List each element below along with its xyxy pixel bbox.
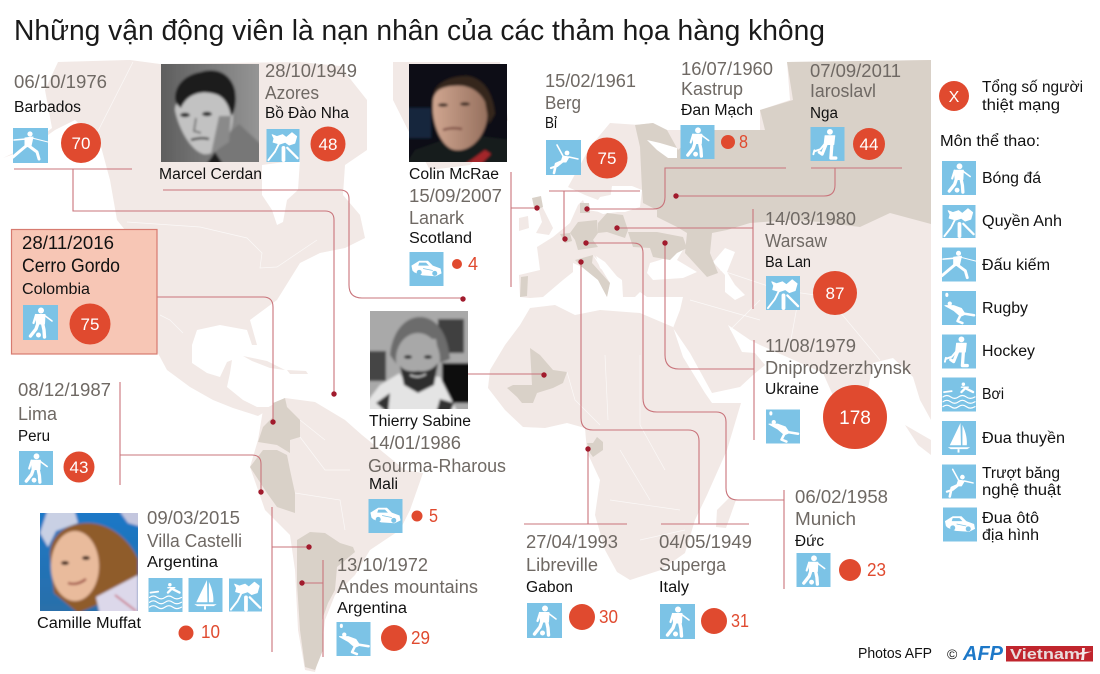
legend: total deaths marker [939, 81, 969, 111]
death toll 75 [586, 138, 628, 178]
panel: Warsaw 1980: 87 [826, 284, 844, 303]
icon: football [19, 451, 53, 485]
legend: rally car: Đua ôtô [982, 510, 1039, 527]
country: Đức [795, 533, 824, 550]
panel: Andes 1972 [336, 555, 478, 656]
place: Lima [18, 404, 58, 424]
map: Madagascar [716, 497, 736, 528]
panel: Superga 1949 [659, 532, 752, 639]
map: Eurasia [519, 60, 931, 445]
panel: Berg 1961: 75 [598, 149, 616, 168]
country: Argentina [147, 554, 218, 571]
legend [939, 79, 1083, 544]
person name: Thierry Sabine [369, 413, 471, 430]
map: White Sea overlay [647, 140, 677, 158]
date: 09/03/2015 [147, 508, 240, 528]
place: Villa Castelli [147, 531, 242, 551]
legend: hockey [942, 334, 1035, 368]
panel: Lanark 2007 [409, 166, 502, 286]
legend: swimming [942, 378, 1004, 412]
panel: Kastrup 1960 [680, 59, 773, 159]
map: Caribbean islands [243, 356, 308, 374]
legend: figure skating: Trượt băng [982, 465, 1060, 482]
icon: boxing [266, 129, 300, 162]
death toll 10 [178, 626, 194, 640]
date: 08/12/1987 [18, 380, 111, 400]
legend: hockey: Hockey [982, 343, 1035, 360]
photo: Colin McRae [409, 64, 507, 162]
legend: sailing [942, 421, 1065, 455]
panel: Gourma-Rharous 1986: 5 [429, 506, 438, 526]
place: Andes mountains [337, 577, 478, 597]
map: Argentina highlighted [297, 532, 355, 670]
highlighted box [12, 230, 157, 354]
date: 06/02/1958 [795, 487, 888, 507]
place: Lanark [409, 208, 465, 228]
date: 14/01/1986 [369, 433, 461, 453]
panel: Superga 1949: 31 [731, 611, 749, 631]
Vietnam+ logo [1006, 646, 1093, 663]
map: White Sea [647, 140, 677, 158]
panel: Munich 1958 [795, 487, 888, 587]
panel: Kastrup 1960: 8 [739, 132, 748, 152]
icon: boxing [229, 578, 262, 612]
death toll 5 [412, 510, 422, 522]
country: Ukraine [765, 381, 819, 398]
legend: sailing: Đua thuyền [982, 430, 1065, 447]
date: 27/04/1993 [526, 532, 618, 552]
legend: football [942, 161, 1041, 195]
legend: rugby: Rugby [982, 300, 1028, 317]
country: Scotland [409, 230, 472, 247]
photo: Marcel Cerdan [161, 64, 259, 162]
country: Bỉ [545, 115, 557, 132]
panel: Barbados 1976: 70 [72, 134, 90, 153]
death toll 30 [569, 604, 595, 630]
panel: Dniprodzerzhynsk 1979: 178 [839, 408, 871, 429]
connector lines [14, 168, 902, 657]
panel: Berg 1961 [545, 71, 636, 178]
icon: boxing [766, 276, 800, 310]
legend: thiệt mạng [982, 97, 1060, 114]
map: Russia highlighted [635, 60, 931, 277]
place: Azores [265, 83, 319, 103]
icon: hockey [810, 127, 844, 161]
footer credits [858, 643, 1093, 665]
icon: fencing [13, 128, 48, 163]
place: Cerro Gordo [22, 256, 120, 277]
death toll 48 [310, 126, 346, 162]
legend: rugby [942, 291, 1028, 325]
country: Bồ Đào Nha [265, 105, 349, 122]
icon: rally car [410, 252, 444, 286]
map: England [536, 206, 553, 235]
date: 28/11/2016 [22, 233, 114, 253]
icon: sailing [188, 578, 222, 612]
place: Warsaw [765, 231, 828, 251]
panel: Villa Castelli 2015: 10 [201, 622, 220, 642]
death toll 29 [381, 625, 407, 651]
panel: Dniprodzerzhynsk 1979 [765, 336, 912, 449]
world map [3, 60, 931, 672]
place: Superga [659, 555, 727, 575]
panel: Villa Castelli 2015 [147, 508, 262, 642]
legend: total deaths label: Tổng số người [982, 79, 1083, 96]
panel: Lima 1987: 43 [70, 458, 88, 477]
map: Mali highlighted [507, 348, 567, 403]
panel: Andes 1972: 29 [411, 628, 430, 648]
date: 28/10/1949 [265, 61, 357, 81]
place: Kastrup [681, 79, 743, 99]
death toll 31 [701, 608, 727, 634]
panel: Cerro Gordo 2016 highlighted [12, 230, 157, 354]
photo: Thierry Sabine [370, 311, 468, 409]
place: Gourma-Rharous [368, 456, 506, 476]
death toll 44 [853, 128, 885, 160]
panel: Azores 1949: 48 [319, 135, 337, 154]
country: Colombia [22, 281, 90, 298]
death toll 178 [823, 385, 887, 449]
panel: Libreville 1993: 30 [599, 607, 618, 627]
map: Scotland highlighted [532, 196, 543, 209]
name: Camille Muffat: Camille Muffat [37, 615, 142, 632]
legend: X [949, 89, 960, 106]
country: Argentina [337, 600, 407, 617]
legend: figure skating: nghệ thuật [982, 482, 1062, 499]
location dots [258, 193, 679, 586]
icon: rally car [368, 499, 402, 533]
map: Gabon highlighted [587, 437, 603, 457]
AFP logo: AFP [962, 643, 1004, 665]
map: Scandinavia [568, 123, 642, 200]
panel: Lima 1987 [18, 380, 111, 485]
map: Greenland [393, 62, 508, 170]
date: 06/10/1976 [14, 72, 107, 92]
country: Ba Lan [765, 254, 811, 271]
map: Portugal highlighted [520, 276, 528, 297]
panel: Azores 1949 [265, 61, 357, 162]
death toll 23 [839, 559, 861, 581]
place: Iaroslavl [810, 81, 876, 101]
map: Malay peninsula [905, 425, 931, 455]
icon: football [796, 553, 830, 587]
icon: swimming [148, 578, 182, 612]
date: 07/09/2011 [810, 61, 901, 81]
legend: football: Bóng đá [982, 170, 1041, 187]
legend: boxing [942, 205, 1062, 238]
person name: Colin McRae [409, 166, 499, 183]
legend: fencing: Đấu kiếm [982, 257, 1050, 274]
legend: rally car: địa hình [982, 527, 1039, 544]
icon: football [660, 604, 695, 639]
map: Germany and Austria highlighted [570, 220, 598, 250]
icon: figure skating [546, 140, 581, 175]
date: 14/03/1980 [765, 209, 856, 229]
map: Peru highlighted [250, 450, 295, 513]
map: Colombia highlighted [258, 398, 300, 453]
date: 15/09/2007 [409, 186, 502, 206]
place: Berg [545, 93, 581, 113]
place: Libreville [526, 555, 598, 575]
country: Italy [659, 579, 689, 596]
place: Dniprodzerzhynsk [765, 358, 912, 378]
map: Baltic Sea [592, 192, 640, 214]
country: Barbados [14, 99, 81, 116]
panel: Cerro Gordo 2016 highlighted: 75 [81, 315, 99, 334]
icon: football [680, 125, 714, 159]
panel: Iaroslavl 2011: 44 [860, 135, 878, 154]
map: Black Sea [647, 250, 697, 280]
icon: football [527, 603, 562, 638]
map: Belgium highlighted [560, 233, 572, 243]
name: Marcel Cerdan: Marcel Cerdan [159, 166, 262, 183]
map: Hudson Bay [262, 160, 300, 225]
map: South America [250, 398, 423, 672]
country: Nga [810, 105, 838, 122]
country: Gabon [526, 579, 573, 596]
Vietnam+ logo: Vietnam [1010, 646, 1080, 663]
panel: Libreville 1993 [526, 532, 618, 638]
panel: Warsaw 1980 [765, 209, 857, 315]
death toll 87 [813, 271, 857, 315]
date: 04/05/1949 [659, 532, 752, 552]
death toll 8 [721, 135, 735, 149]
legend: fencing [942, 248, 1050, 282]
photo: Camille Muffat [40, 513, 138, 611]
panel: Barbados 1976 [13, 72, 107, 163]
country: Peru [18, 428, 50, 445]
map: Denmark highlighted [580, 203, 590, 213]
map: Ireland [519, 216, 529, 231]
panel: Gourma-Rharous 1986 [368, 413, 506, 533]
country: Đan Mạch [681, 102, 753, 119]
panel: Lanark 2007: 4 [468, 254, 478, 274]
date: 11/08/1979 [765, 336, 856, 356]
map: Italy highlighted [575, 255, 610, 297]
map: North America [3, 60, 367, 416]
death toll 43 [64, 452, 94, 482]
icon: rugby [766, 410, 800, 444]
map: Caspian Sea [713, 248, 745, 300]
legend: rally car [943, 508, 1039, 544]
death toll 4 [452, 259, 462, 269]
death toll 70 [61, 123, 101, 163]
copyright sign: © [947, 646, 958, 662]
panel: Iaroslavl 2011 [810, 61, 901, 161]
photo credit: Photos AFP [858, 646, 932, 662]
date: 13/10/1972 [337, 555, 428, 575]
place: Munich [795, 509, 856, 529]
legend: swimming: Bơi [982, 386, 1004, 403]
legend: boxing: Quyền Anh [982, 213, 1062, 230]
map: Ukraine highlighted [628, 232, 687, 260]
icon: football [23, 305, 58, 340]
title: Những vận động viên là nạn nhân của các thảm họa hàng không [14, 15, 825, 47]
date: 16/07/1960 [681, 59, 773, 79]
map: Adriatic and Aegean Seas [596, 256, 620, 282]
date: 15/02/1961 [545, 71, 636, 91]
legend: figure skating [942, 464, 1062, 499]
icon: rugby [336, 622, 370, 656]
panel: Munich 1958: 23 [867, 560, 886, 580]
death toll 75 [70, 304, 110, 344]
country: Mali [369, 476, 398, 493]
map: Poland highlighted [598, 213, 628, 238]
map: Africa [488, 305, 741, 580]
legend: sports heading: Môn thể thao: [940, 133, 1040, 150]
